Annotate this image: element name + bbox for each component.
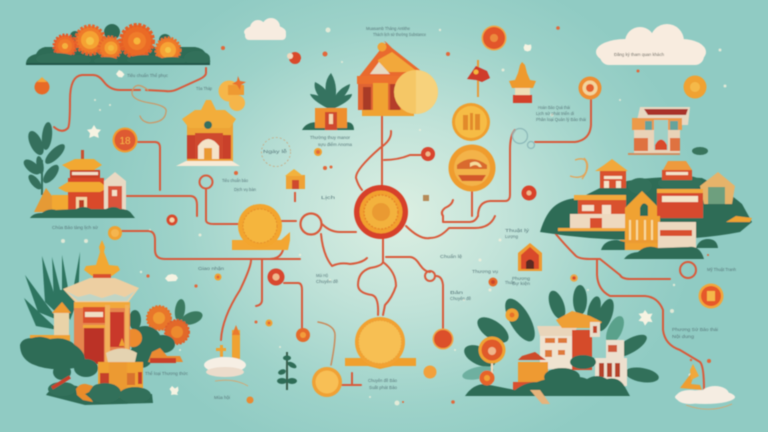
- text: right caption block: Hoàn Bảo Quá thái: [538, 105, 570, 110]
- cloud: bottom-right with dragon: [675, 364, 735, 409]
- flower: small: [314, 148, 322, 156]
- text: centre-right labels: Thương vụ: [472, 269, 499, 274]
- garden bushes: [465, 355, 630, 396]
- diagram: dashed ring label: [262, 138, 290, 166]
- text: centre-right labels: Chuẩn lệ: [440, 253, 463, 259]
- bush main: [20, 337, 85, 369]
- text: right caption block: [536, 105, 586, 122]
- orange flowers: [147, 298, 204, 344]
- flower: small marker lower left: [214, 274, 222, 280]
- cloud: top-right labelled: Đăng ký tham quan khách: [614, 52, 664, 57]
- lower small temple: [98, 338, 143, 398]
- text: pagoda caption: Thể loại Thương thức: [145, 370, 189, 376]
- house: red centre: [556, 311, 602, 370]
- shrine: small gold: [285, 169, 305, 202]
- text: right labels: Mỹ Thuật Tranh: [707, 267, 736, 272]
- text: centre-right labels: Thuật lý: [505, 228, 530, 233]
- illustrated map: Dịch vụ bàn: [234, 187, 256, 192]
- cloud: bottom with spire: [204, 325, 248, 386]
- text: centre-right labels: Bản: [450, 290, 464, 295]
- text: lower gold coin caption: [368, 378, 397, 390]
- building: left red temple: [34, 150, 126, 213]
- bushes behind: [129, 310, 175, 368]
- building: lower pale hall: [658, 222, 696, 250]
- diagram: dashed ring label: Ngày lễ: [263, 148, 288, 154]
- text: far labels: Thuần: [505, 280, 515, 285]
- text: lower-centre labels: [316, 273, 338, 284]
- text: lower-right caption: [672, 326, 718, 339]
- flower: orange 2: [76, 26, 104, 54]
- flower small low: [480, 370, 494, 386]
- scattered dots: [61, 28, 726, 406]
- illustrated map: Giao nhận: [198, 266, 225, 271]
- badge: left red coin: 18: [119, 136, 131, 147]
- flower: orange 1: [54, 35, 76, 57]
- loop: line junction circles: [200, 176, 696, 281]
- badge: left red coin: [112, 128, 138, 152]
- illustrated map: Tiêu chuẩn bảo: [222, 177, 248, 183]
- flower: orange 3: [99, 37, 121, 59]
- flower: left of coin: [166, 214, 178, 226]
- text: arch house caption: Phương: [512, 276, 530, 281]
- ornament: top-right statue: [509, 62, 536, 103]
- ornament: orange fruit: [34, 77, 50, 94]
- house: white lower: [595, 340, 627, 386]
- coin: small orange: [424, 366, 436, 378]
- text: right caption block: Phân loại Quản lý Bảo thái: [536, 117, 586, 122]
- coin: top-right gold: [684, 76, 706, 98]
- flower: gear coin: [578, 76, 602, 100]
- text: right caption block: Lịch sử phát triển di: [536, 110, 574, 116]
- coin: small orange: [246, 396, 254, 404]
- building: main red hall: [574, 195, 626, 219]
- spiky leaves: [24, 252, 82, 330]
- building: top-right palace: [628, 107, 708, 155]
- text: lower gold coin caption: Chuyên đề Bảo: [368, 378, 397, 383]
- text: central title: [366, 26, 426, 37]
- coin: big pedestal coin: [345, 317, 416, 369]
- illustrated map: Tòa Tháp: [196, 86, 212, 91]
- badge: red right: [522, 186, 536, 200]
- connector lines: [54, 68, 704, 390]
- bush front: [48, 382, 151, 403]
- building: lower-left wing: [558, 214, 625, 231]
- text: lower-right caption: Nội dung: [672, 334, 695, 339]
- medallion: central coin: [354, 185, 408, 239]
- flower: left of centre: [296, 328, 310, 342]
- cloud: top-right labelled: [596, 24, 706, 65]
- panel: lower-left pagoda garden: [20, 240, 204, 405]
- text: lower gold coin caption: Suất phát Bảo: [369, 385, 397, 390]
- text: upper-left labels: Tiêu chuẩn Thể phục: [127, 72, 169, 78]
- text: central title: Thách lịch sử thường Substance: [373, 31, 426, 37]
- flower: orange 5: [156, 38, 180, 62]
- text: shrine caption: [310, 135, 352, 147]
- text: lower-right caption: Phương Sử Bảo thái: [672, 326, 718, 332]
- cloud: top centre-left: [244, 18, 286, 40]
- coin: left small gold: [108, 226, 122, 240]
- house: pale main: [537, 326, 578, 369]
- scattered accents: [146, 26, 711, 404]
- panel: top-left flower bush: [26, 24, 210, 65]
- illustrated map: Mùa hội: [214, 395, 230, 400]
- text: shrine caption: Thường thuy manor: [310, 135, 350, 140]
- coin: central pale gold: [394, 70, 438, 114]
- building: upper gold temple: [176, 100, 240, 166]
- badge: red disc lower-left: [268, 268, 284, 286]
- coin: lower gold: [312, 367, 342, 397]
- panel: right palace cluster: [540, 159, 752, 259]
- bush base: [36, 51, 210, 65]
- ornament: gold coins cluster: [218, 76, 246, 111]
- flower: small marker: [266, 320, 272, 326]
- plant: left leaves: [21, 122, 68, 195]
- building: lower gold colonnade: [620, 216, 665, 250]
- lower bushes: [46, 359, 153, 405]
- small left tower: [30, 302, 71, 343]
- building: far-right house: [700, 172, 735, 204]
- stair: [530, 390, 550, 404]
- bush: lower: [601, 239, 718, 259]
- badge: small amber marker: [570, 274, 578, 282]
- illustrated map: Lịch: [321, 195, 336, 200]
- lollipop flower large: [478, 336, 506, 383]
- ring: pale blue nodes: [512, 128, 534, 148]
- building: right red hall: [657, 189, 703, 218]
- bush base left temple: [30, 207, 135, 218]
- text: lower-centre labels: Múi Hộ: [316, 273, 328, 278]
- text: shrine caption: sựu điểm Anoma: [318, 141, 352, 147]
- small dragon: [76, 384, 93, 402]
- ornament: red berry: [287, 52, 301, 64]
- text: arch house caption: [512, 276, 531, 286]
- building: top pavilion: [595, 159, 628, 188]
- flower bush foliage: [26, 24, 210, 63]
- badge: red coin right of pedestal: [432, 328, 454, 350]
- stars: [87, 44, 652, 395]
- flower: small centre-right: [488, 278, 498, 286]
- ornament: red flower on stem: [467, 60, 490, 97]
- flower: orange 4: [121, 25, 153, 57]
- coin: gold right upper: [452, 103, 490, 141]
- small offering box: [148, 348, 183, 363]
- building: central temple: [357, 41, 422, 116]
- ornament: small tiny coin: [423, 195, 429, 201]
- text: lower-centre labels: Chuyên đề: [316, 279, 338, 284]
- plant: potted palm shrine: [302, 73, 354, 130]
- text: central title: Muasamb Thảng Antithe: [366, 26, 410, 31]
- panel: bottom-right garden cluster: [461, 285, 660, 404]
- icon: arch house: [518, 243, 542, 271]
- illustrated map: Chùa Bảo tàng lịch sử: [52, 224, 98, 230]
- badge: top red sun: [482, 26, 506, 50]
- icon: small tree: [277, 352, 298, 390]
- ornament: crescent: [570, 158, 588, 179]
- red ribbon: [52, 377, 70, 388]
- coin: left pedestal coin: [232, 204, 290, 250]
- coin: gold right lower: [448, 144, 496, 192]
- text: arch house caption: Sự kiện: [512, 281, 531, 286]
- badge: right red gold coin: [698, 284, 724, 308]
- building: back red hall: [662, 161, 692, 180]
- text: centre-right labels: [440, 228, 530, 301]
- garden leaves: [461, 285, 660, 385]
- pagoda body: [74, 302, 130, 365]
- building: gold arch: [625, 191, 663, 216]
- flower small top: [506, 308, 518, 322]
- house: orange left: [513, 352, 548, 390]
- text: centre-right labels: Lượng: [505, 234, 518, 239]
- badge: small red disc: [421, 147, 435, 161]
- pagoda roof top: [84, 240, 120, 276]
- text: centre-right labels: Chuyên đề: [450, 296, 471, 301]
